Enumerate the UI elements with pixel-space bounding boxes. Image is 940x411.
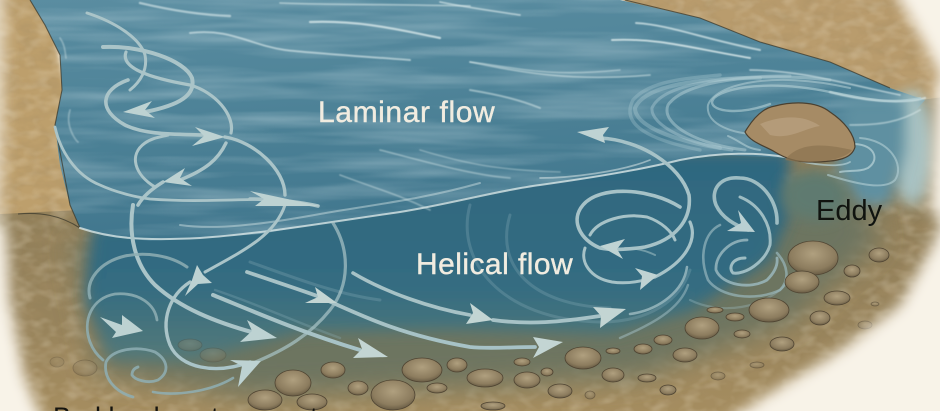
right helix arrows [577,138,692,338]
label: Eddy: Eddy [816,195,883,227]
boulder [745,103,855,162]
riverbed pebbles [50,241,889,410]
laminar surface streaks [60,2,925,210]
lower water: helical zone [85,150,790,362]
left river bank [0,0,95,275]
right eddy spiral [690,178,790,308]
helical long flow arrowheads [305,287,626,358]
top-right river bank [600,0,940,110]
faint helical ripples [215,205,690,338]
bank edge lines [18,0,890,228]
eddy ripples around boulder [630,75,920,185]
right helix arrowheads [577,127,658,290]
label: Helical flow: Helical flow [416,248,573,281]
river bed [0,95,940,411]
upper water: laminar zone [30,0,925,241]
water surface boundary line [80,154,790,239]
pale wash at right edge of pool [890,90,934,206]
eddy pool right of boulder [835,100,905,205]
lower-left swirls [87,254,233,397]
olive shallows under boulder [781,169,849,221]
bed shading near water [72,190,880,396]
right eddy arrowhead [727,210,755,232]
label: Laminar flow: Laminar flow [318,96,495,129]
helical long flow arrows [213,272,600,350]
left arrowheads [100,101,320,387]
left spiral arrows: laminar zone [55,13,345,368]
